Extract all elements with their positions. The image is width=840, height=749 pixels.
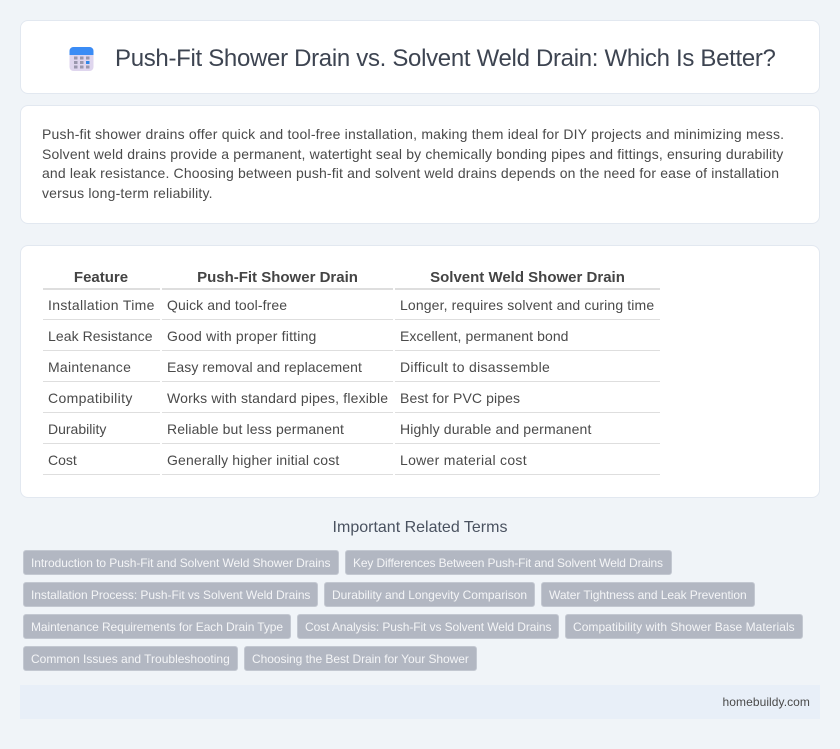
comparison table: Longer, requires solvent and curing time <box>400 297 654 313</box>
comparison table: Feature <box>74 269 128 286</box>
related term tags: Key Differences Between Push-Fit and Solvent Weld Drains <box>353 556 663 570</box>
text block: introduction: Solvent weld drains provide a permanent, watertight seal by chemically bonding pipes and fittings, ensuring durability <box>42 146 783 162</box>
footer source: homebuildy.com <box>723 695 810 709</box>
panel: introduction <box>20 105 820 224</box>
title: Push-Fit Shower Drain vs. Solvent Weld Drain: Which Is Better? <box>115 45 776 72</box>
text block: introduction: Push-fit shower drains offer quick and tool-free installation, making them ideal for DIY projects and minimizing mess. <box>42 126 784 142</box>
panel: header <box>20 20 820 94</box>
comparison table: Difficult to disassemble <box>400 359 550 375</box>
heading: related terms: Important Related Terms <box>333 519 507 536</box>
comparison table: Push-Fit Shower Drain <box>197 269 358 286</box>
related term tags: Cost Analysis: Push-Fit vs Solvent Weld Drains <box>305 620 551 634</box>
related term tags: Maintenance Requirements for Each Drain Type <box>31 620 283 634</box>
comparison table: Lower material cost <box>400 452 527 468</box>
comparison table: Generally higher initial cost <box>167 452 339 468</box>
text block: introduction <box>42 126 784 201</box>
related term tags: Introduction to Push-Fit and Solvent Weld Shower Drains <box>31 556 330 570</box>
related term tags: Durability and Longevity Comparison <box>332 588 527 602</box>
comparison table: Installation Time <box>48 297 155 313</box>
comparison table: Solvent Weld Shower Drain <box>430 269 625 286</box>
comparison table: Highly durable and permanent <box>400 421 592 437</box>
comparison table: Quick and tool-free <box>167 297 287 313</box>
related term tags: Common Issues and Troubleshooting <box>31 652 230 666</box>
related term tags: Compatibility with Shower Base Materials <box>573 620 795 634</box>
comparison table <box>43 269 660 475</box>
text block: introduction: and leak resistance. Choosing between push-fit and solvent weld drains depends on the need for ease of installation <box>42 165 779 181</box>
comparison table: Compatibility <box>48 390 133 406</box>
related term tags: Installation Process: Push-Fit vs Solvent Weld Drains <box>31 588 310 602</box>
comparison table: Durability <box>48 421 106 437</box>
comparison table: Cost <box>48 452 77 468</box>
related term tags: Choosing the Best Drain for Your Shower <box>252 652 469 666</box>
footer bar <box>20 685 820 719</box>
icon: calendar <box>70 47 94 71</box>
related term tags: Water Tightness and Leak Prevention <box>549 588 747 602</box>
comparison table: Reliable but less permanent <box>167 421 344 437</box>
related term tags <box>23 550 803 671</box>
comparison table: Maintenance <box>48 359 131 375</box>
comparison table: Easy removal and replacement <box>167 359 362 375</box>
comparison table: Works with standard pipes, flexible <box>167 390 388 406</box>
comparison table: Excellent, permanent bond <box>400 328 569 344</box>
panel: comparison table <box>20 245 820 498</box>
text block: introduction: versus long-term reliability. <box>42 184 213 200</box>
comparison table: Best for PVC pipes <box>400 390 520 406</box>
comparison table: Good with proper fitting <box>167 328 317 344</box>
comparison table: Leak Resistance <box>48 328 153 344</box>
